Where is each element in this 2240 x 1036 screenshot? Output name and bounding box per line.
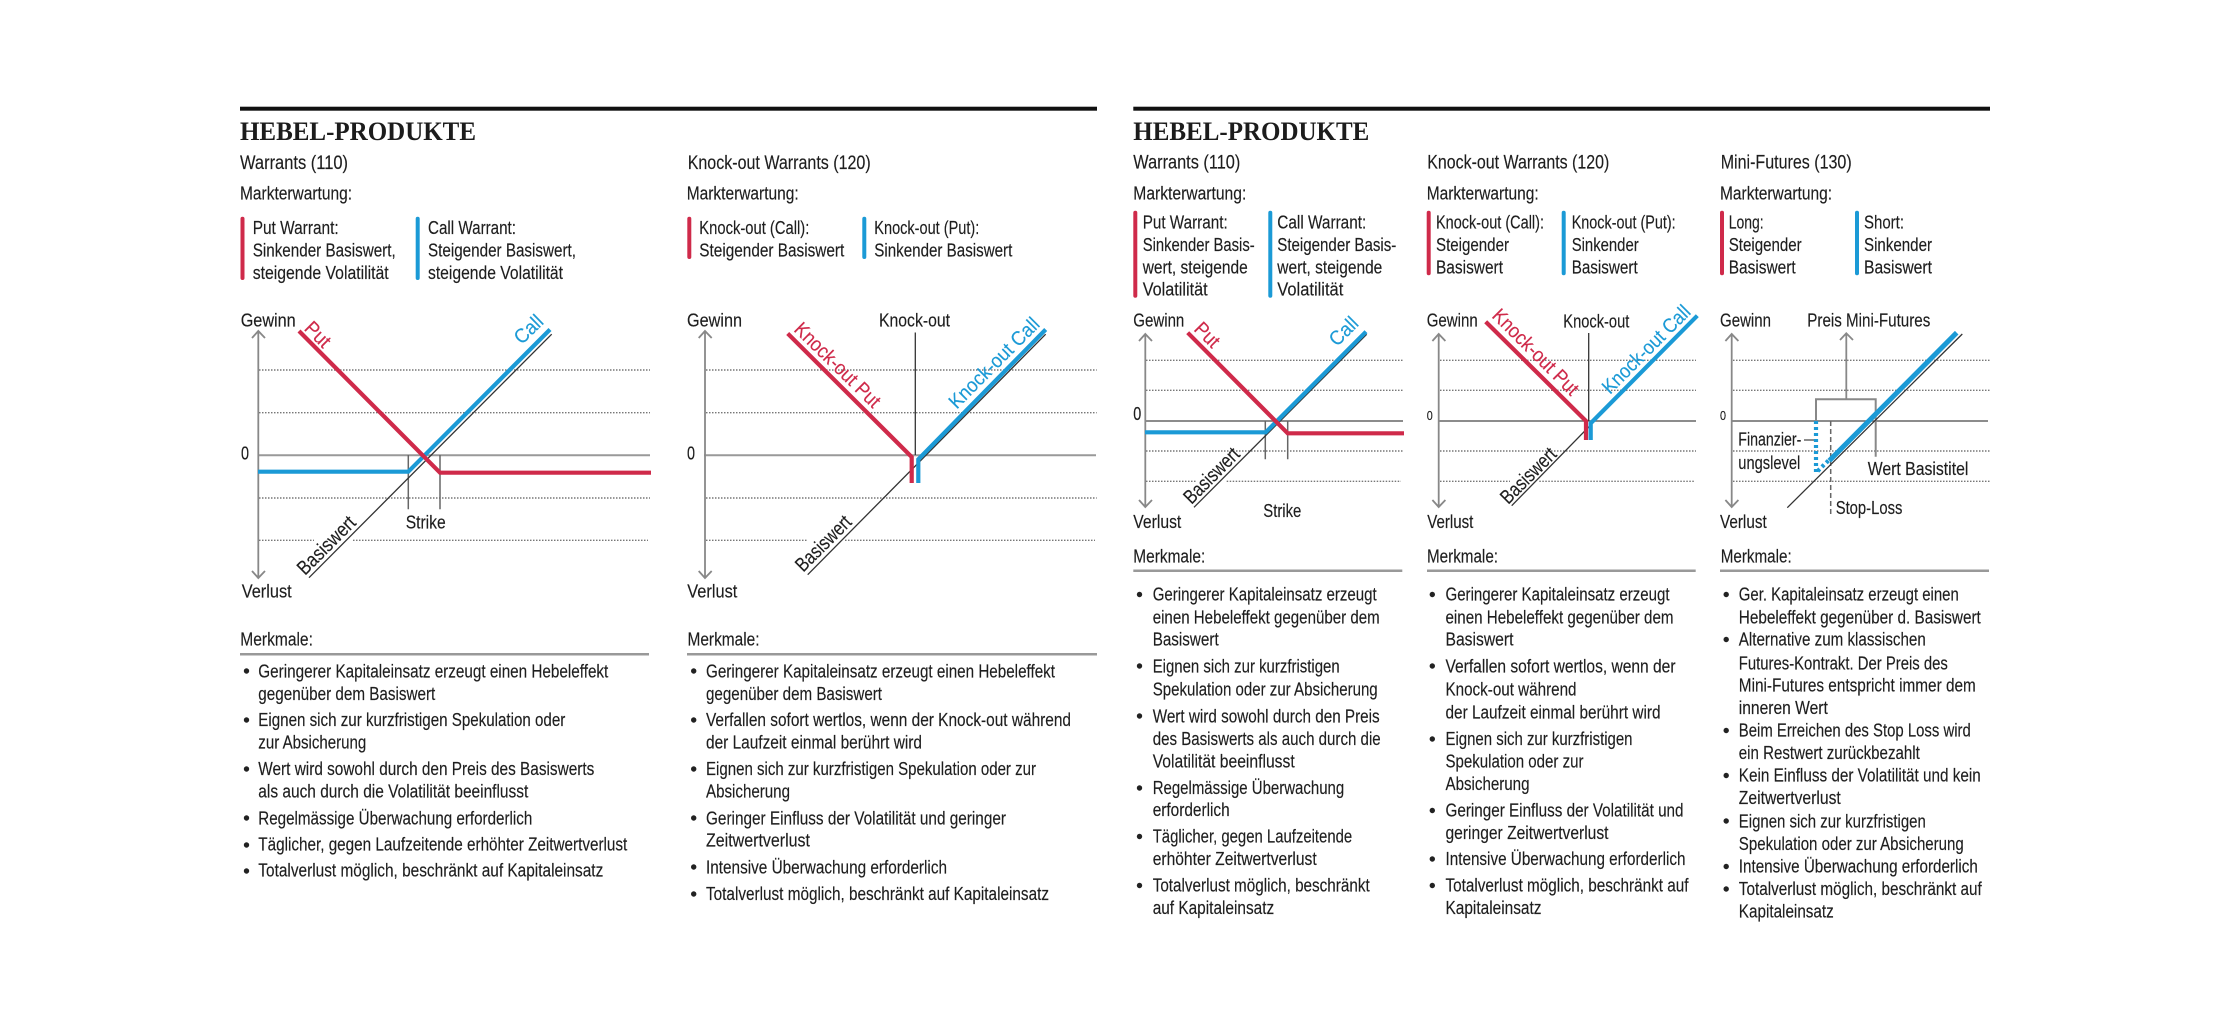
heading: Knock-out Warrants: Knock-out Warrants (120) (1427, 152, 1609, 173)
feature list: warrants: des Basiswerts als auch durch die (1153, 729, 1381, 749)
legend: put warrant: Sinkender Basis- (1143, 235, 1255, 255)
chart: mini-futures payoff: Preis Mini-Futures (1807, 310, 1930, 330)
legend: put warrant: Put Warrant: (253, 218, 339, 238)
feature list: knock-out warrants: Totalverlust möglich, beschränkt auf (1446, 876, 1689, 896)
panel: right sheet, Warrants (1133, 107, 1990, 918)
chart: knock-out payoff: Knock-out (879, 311, 950, 331)
feature list: knock-out warrants: Verfallen sofort wertlos, wenn der Knock-out während (706, 710, 1071, 730)
chart: warrants payoff: 0 (241, 443, 249, 463)
legend: put warrant: wert, steigende (1142, 257, 1248, 277)
chart: warrants payoff: Basiswert (293, 512, 361, 580)
chart: warrants payoff: Put (1189, 318, 1224, 353)
feature list: knock-out warrants: Intensive Überwachung erforderlich (1446, 849, 1686, 869)
chart: mini-futures payoff: Gewinn (1720, 310, 1771, 330)
feature list: knock-out warrants: Absicherung (1446, 774, 1530, 794)
top rule left sheet (240, 107, 1097, 111)
chart: mini-futures payoff: Verlust (1720, 512, 1767, 532)
top rule right sheet (1133, 107, 1990, 111)
chart: mini-futures payoff: 0 (1720, 408, 1726, 423)
feature list: warrants: Regelmässige Überwachung erforderlich (258, 808, 532, 828)
feature list: knock-out warrants: Geringer Einfluss der Volatilität und (1446, 801, 1684, 821)
chart: warrants payoff (241, 311, 651, 602)
feature list: warrants: als auch durch die Volatilität beeinflusst (258, 782, 528, 802)
legend: short (1855, 211, 1932, 277)
feature list: warrants: zur Absicherung (258, 733, 366, 753)
chart: warrants payoff: Put (300, 317, 335, 353)
feature list: mini-futures: Hebeleffekt gegenüber d. Basiswert (1739, 607, 1981, 627)
feature list: warrants: Totalverlust möglich, beschränkt (1153, 876, 1370, 896)
legend: put warrant: Sinkender Basiswert, (253, 241, 396, 261)
feature list: mini-futures: Alternative zum klassischen (1739, 630, 1926, 650)
chart: warrants payoff: Strike (406, 512, 446, 532)
heading: Warrants: Warrants (110) (240, 153, 348, 174)
legend: long: Basiswert (1729, 257, 1796, 277)
feature list: warrants: einen Hebeleffekt gegenüber dem (1153, 607, 1380, 627)
feature list: warrants: erhöhter Zeitwertverlust (1153, 849, 1317, 869)
feature list: mini-futures: Mini-Futures entspricht immer dem (1739, 676, 1976, 696)
legend: call warrant (416, 217, 576, 283)
chart: knock-out payoff: Knock-out Call (1598, 301, 1695, 399)
feature list: knock-out warrants: Intensive Überwachung erforderlich (706, 857, 947, 877)
divider Merkmale (687, 653, 1097, 656)
feature list: warrants (244, 661, 627, 881)
legend: knock-out put: Basiswert (1572, 257, 1638, 277)
legend: put warrant: Put Warrant: (1143, 212, 1228, 232)
chart: knock-out payoff: 0 (1427, 408, 1433, 423)
feature list: warrants: Geringerer Kapitaleinsatz erzeugt (1153, 585, 1377, 605)
label: Merkmale: Merkmale: (1133, 547, 1205, 567)
legend: short: Basiswert (1864, 257, 1932, 277)
legend: put warrant (240, 217, 396, 283)
chart: warrants payoff: Strike (1263, 501, 1301, 521)
feature list: mini-futures: Eignen sich zur kurzfristigen (1739, 811, 1926, 831)
label: Merkmale: Merkmale: (1721, 547, 1792, 567)
legend: call warrant (1268, 211, 1396, 300)
feature list: knock-out warrants: Basiswert (1446, 630, 1514, 650)
legend: put warrant: Volatilität (1143, 280, 1208, 300)
chart: knock-out payoff: Gewinn (1427, 310, 1478, 330)
feature list: knock-out warrants: einen Hebeleffekt gegenüber dem (1446, 607, 1674, 627)
chart: mini-futures payoff (1720, 310, 1990, 532)
feature list: knock-out warrants: gegenüber dem Basiswert (706, 684, 882, 704)
label: Markterwartung: Markterwartung: (1720, 183, 1832, 203)
feature list: warrants: Täglicher, gegen Laufzeitende erhöhter Zeitwertverlust (258, 835, 627, 855)
chart: mini-futures payoff: Finanzier- (1738, 430, 1801, 450)
feature list: knock-out warrants: Geringer Einfluss der Volatilität und geringer (706, 808, 1006, 828)
feature list: knock-out warrants: geringer Zeitwertverlust (1446, 823, 1608, 843)
legend: call warrant: Steigender Basis- (1277, 235, 1396, 255)
feature list: warrants: erforderlich (1153, 800, 1230, 820)
legend: short: Short: (1864, 212, 1904, 232)
feature list: mini-futures: inneren Wert (1739, 698, 1828, 718)
legend: knock-out call: Steigender Basiswert (699, 241, 844, 261)
feature list: knock-out warrants: Spekulation oder zur (1446, 751, 1584, 771)
feature list: knock-out warrants (691, 661, 1071, 904)
feature list: warrants: Eignen sich zur kurzfristigen (1153, 656, 1340, 676)
feature list: warrants (1137, 585, 1381, 918)
divider Merkmale (1427, 569, 1696, 572)
feature list: mini-futures: Totalverlust möglich, beschränkt auf (1739, 879, 1983, 899)
chart: knock-out payoff: Knock-out (1563, 311, 1629, 331)
panel: left sheet, Knock-out Warrants (687, 153, 1097, 904)
divider Merkmale (1133, 569, 1402, 572)
legend: knock-out call: Basiswert (1436, 257, 1503, 277)
chart: knock-out payoff: Knock-out Call (945, 314, 1044, 413)
feature list: warrants: Totalverlust möglich, beschränkt auf Kapitaleinsatz (258, 861, 603, 881)
legend: short: Sinkender (1864, 235, 1932, 255)
legend: long: Long: (1729, 212, 1764, 232)
feature list: mini-futures: Intensive Überwachung erforderlich (1739, 857, 1978, 877)
legend: put warrant: steigende Volatilität (253, 263, 389, 283)
chart: warrants payoff: 0 (1133, 404, 1141, 424)
heading: Knock-out Warrants: Knock-out Warrants (120) (688, 153, 871, 174)
legend: knock-out call (1427, 211, 1544, 277)
legend: knock-out call: Knock-out (Call): (699, 218, 809, 238)
feature list: warrants: Volatilität beeinflusst (1153, 751, 1295, 771)
feature list: warrants: auf Kapitaleinsatz (1153, 898, 1274, 918)
feature list: mini-futures: ein Restwert zurückbezahlt (1739, 743, 1920, 763)
feature list: warrants: Täglicher, gegen Laufzeitende (1153, 827, 1352, 847)
feature list: knock-out warrants: Verfallen sofort wertlos, wenn der (1446, 656, 1676, 676)
chart: warrants payoff: Call (1325, 313, 1363, 351)
chart: knock-out payoff: Knock-out Put (1487, 305, 1583, 400)
chart: knock-out payoff: Basiswert (1496, 443, 1562, 509)
feature list: knock-out warrants: Zeitwertverlust (706, 831, 810, 851)
chart: warrants payoff: Verlust (242, 582, 292, 602)
label: Markterwartung: Markterwartung: (1133, 183, 1246, 203)
feature list: warrants: Spekulation oder zur Absicherung (1153, 680, 1378, 700)
chart: knock-out payoff: 0 (687, 443, 695, 463)
legend: call warrant: Steigender Basiswert, (428, 241, 576, 261)
feature list: mini-futures: Spekulation oder zur Absicherung (1739, 834, 1964, 854)
feature list: mini-futures: Kapitaleinsatz (1739, 901, 1834, 921)
legend: call warrant: Call Warrant: (1277, 212, 1366, 232)
feature list: warrants: Regelmässige Überwachung (1153, 778, 1344, 798)
feature list: warrants: Geringerer Kapitaleinsatz erzeugt einen Hebeleffekt (258, 661, 608, 681)
feature list: mini-futures (1724, 585, 1983, 921)
chart: knock-out payoff: Verlust (687, 582, 737, 602)
legend: knock-out call: Knock-out (Call): (1436, 212, 1544, 232)
feature list: knock-out warrants: Eignen sich zur kurzfristigen Spekulation oder zur (706, 759, 1036, 779)
feature list: mini-futures: Ger. Kapitaleinsatz erzeugt einen (1739, 585, 1959, 605)
chart: knock-out payoff: Basiswert (791, 511, 857, 576)
feature list: knock-out warrants: der Laufzeit einmal berührt wird (706, 733, 922, 753)
title left sheet: HEBEL-PRODUKTE (240, 117, 476, 146)
legend: call warrant: Call Warrant: (428, 218, 516, 238)
feature list: mini-futures: Zeitwertverlust (1739, 788, 1841, 808)
feature list: mini-futures: Beim Erreichen des Stop Loss wird (1739, 721, 1971, 741)
feature list: knock-out warrants: Kapitaleinsatz (1446, 898, 1542, 918)
chart: warrants payoff: Call (510, 311, 548, 349)
chart: knock-out payoff: Verlust (1427, 512, 1473, 532)
chart: knock-out payoff (1427, 301, 1697, 532)
heading: Mini-Futures: Mini-Futures (130) (1721, 152, 1852, 173)
chart: knock-out payoff: Knock-out Put (789, 318, 885, 413)
legend: put warrant (1133, 211, 1255, 300)
legend: knock-out put: Sinkender Basiswert (874, 241, 1012, 261)
feature list: knock-out warrants: Knock-out während (1446, 680, 1576, 700)
chart: mini-futures payoff: Stop-Loss (1836, 498, 1902, 518)
feature list: knock-out warrants: Absicherung (706, 782, 790, 802)
label: Markterwartung: Markterwartung: (1427, 183, 1539, 203)
chart: warrants payoff: Gewinn (1133, 310, 1184, 330)
legend: knock-out put: Knock-out (Put): (1572, 212, 1676, 232)
label: Merkmale: Merkmale: (688, 630, 760, 650)
legend: knock-out call (687, 217, 844, 261)
legend: knock-out put (1562, 211, 1676, 277)
legend: call warrant: Volatilität (1277, 280, 1343, 300)
feature list: knock-out warrants: Geringerer Kapitaleinsatz erzeugt (1446, 585, 1670, 605)
feature list: knock-out warrants: Eignen sich zur kurzfristigen (1446, 729, 1632, 749)
feature list: warrants: gegenüber dem Basiswert (258, 684, 435, 704)
heading: Warrants: Warrants (110) (1133, 152, 1240, 173)
legend: call warrant: wert, steigende (1276, 257, 1382, 277)
title right sheet: HEBEL-PRODUKTE (1133, 117, 1369, 146)
legend: long (1720, 211, 1802, 277)
feature list: mini-futures: Futures-Kontrakt. Der Preis des (1739, 653, 1948, 673)
feature list: knock-out warrants: der Laufzeit einmal berührt wird (1446, 702, 1660, 722)
feature list: warrants: Wert wird sowohl durch den Preis (1153, 706, 1380, 726)
divider Merkmale (1720, 569, 1989, 572)
legend: knock-out put: Knock-out (Put): (874, 218, 979, 238)
label: Merkmale: Merkmale: (240, 630, 313, 650)
feature list: warrants: Wert wird sowohl durch den Preis des Basiswerts (258, 759, 594, 779)
chart: knock-out payoff: Gewinn (687, 311, 742, 331)
legend: call warrant: steigende Volatilität (428, 263, 563, 283)
label: Markterwartung: Markterwartung: (687, 183, 799, 203)
legend: knock-out put (862, 217, 1012, 261)
chart: knock-out payoff (687, 311, 1097, 602)
feature list: knock-out warrants: Totalverlust möglich, beschränkt auf Kapitaleinsatz (706, 884, 1049, 904)
panel: right sheet, Mini-Futures (1720, 152, 1990, 921)
label: Markterwartung: Markterwartung: (240, 183, 352, 203)
feature list: mini-futures: Kein Einfluss der Volatilität und kein (1739, 766, 1981, 786)
chart: mini-futures payoff: Wert Basistitel (1868, 459, 1968, 479)
label: Merkmale: Merkmale: (1427, 547, 1498, 567)
feature list: warrants: Eignen sich zur kurzfristigen Spekulation oder (258, 710, 565, 730)
panel: right sheet, Knock-out Warrants (1427, 152, 1697, 918)
divider Merkmale (240, 653, 649, 656)
feature list: warrants: Basiswert (1153, 630, 1219, 650)
chart: mini-futures payoff: ungslevel (1738, 453, 1800, 473)
panel: left sheet, Warrants (240, 107, 1097, 881)
legend: long: Steigender (1729, 235, 1802, 255)
feature list: knock-out warrants (1430, 585, 1689, 918)
chart: warrants payoff: Verlust (1133, 512, 1181, 532)
chart: warrants payoff: Gewinn (241, 311, 296, 331)
legend: knock-out call: Steigender (1436, 235, 1509, 255)
feature list: knock-out warrants: Geringerer Kapitaleinsatz erzeugt einen Hebeleffekt (706, 661, 1055, 681)
legend: knock-out put: Sinkender (1572, 235, 1639, 255)
chart: warrants payoff: Basiswert (1179, 443, 1245, 509)
chart: warrants payoff (1133, 310, 1404, 532)
